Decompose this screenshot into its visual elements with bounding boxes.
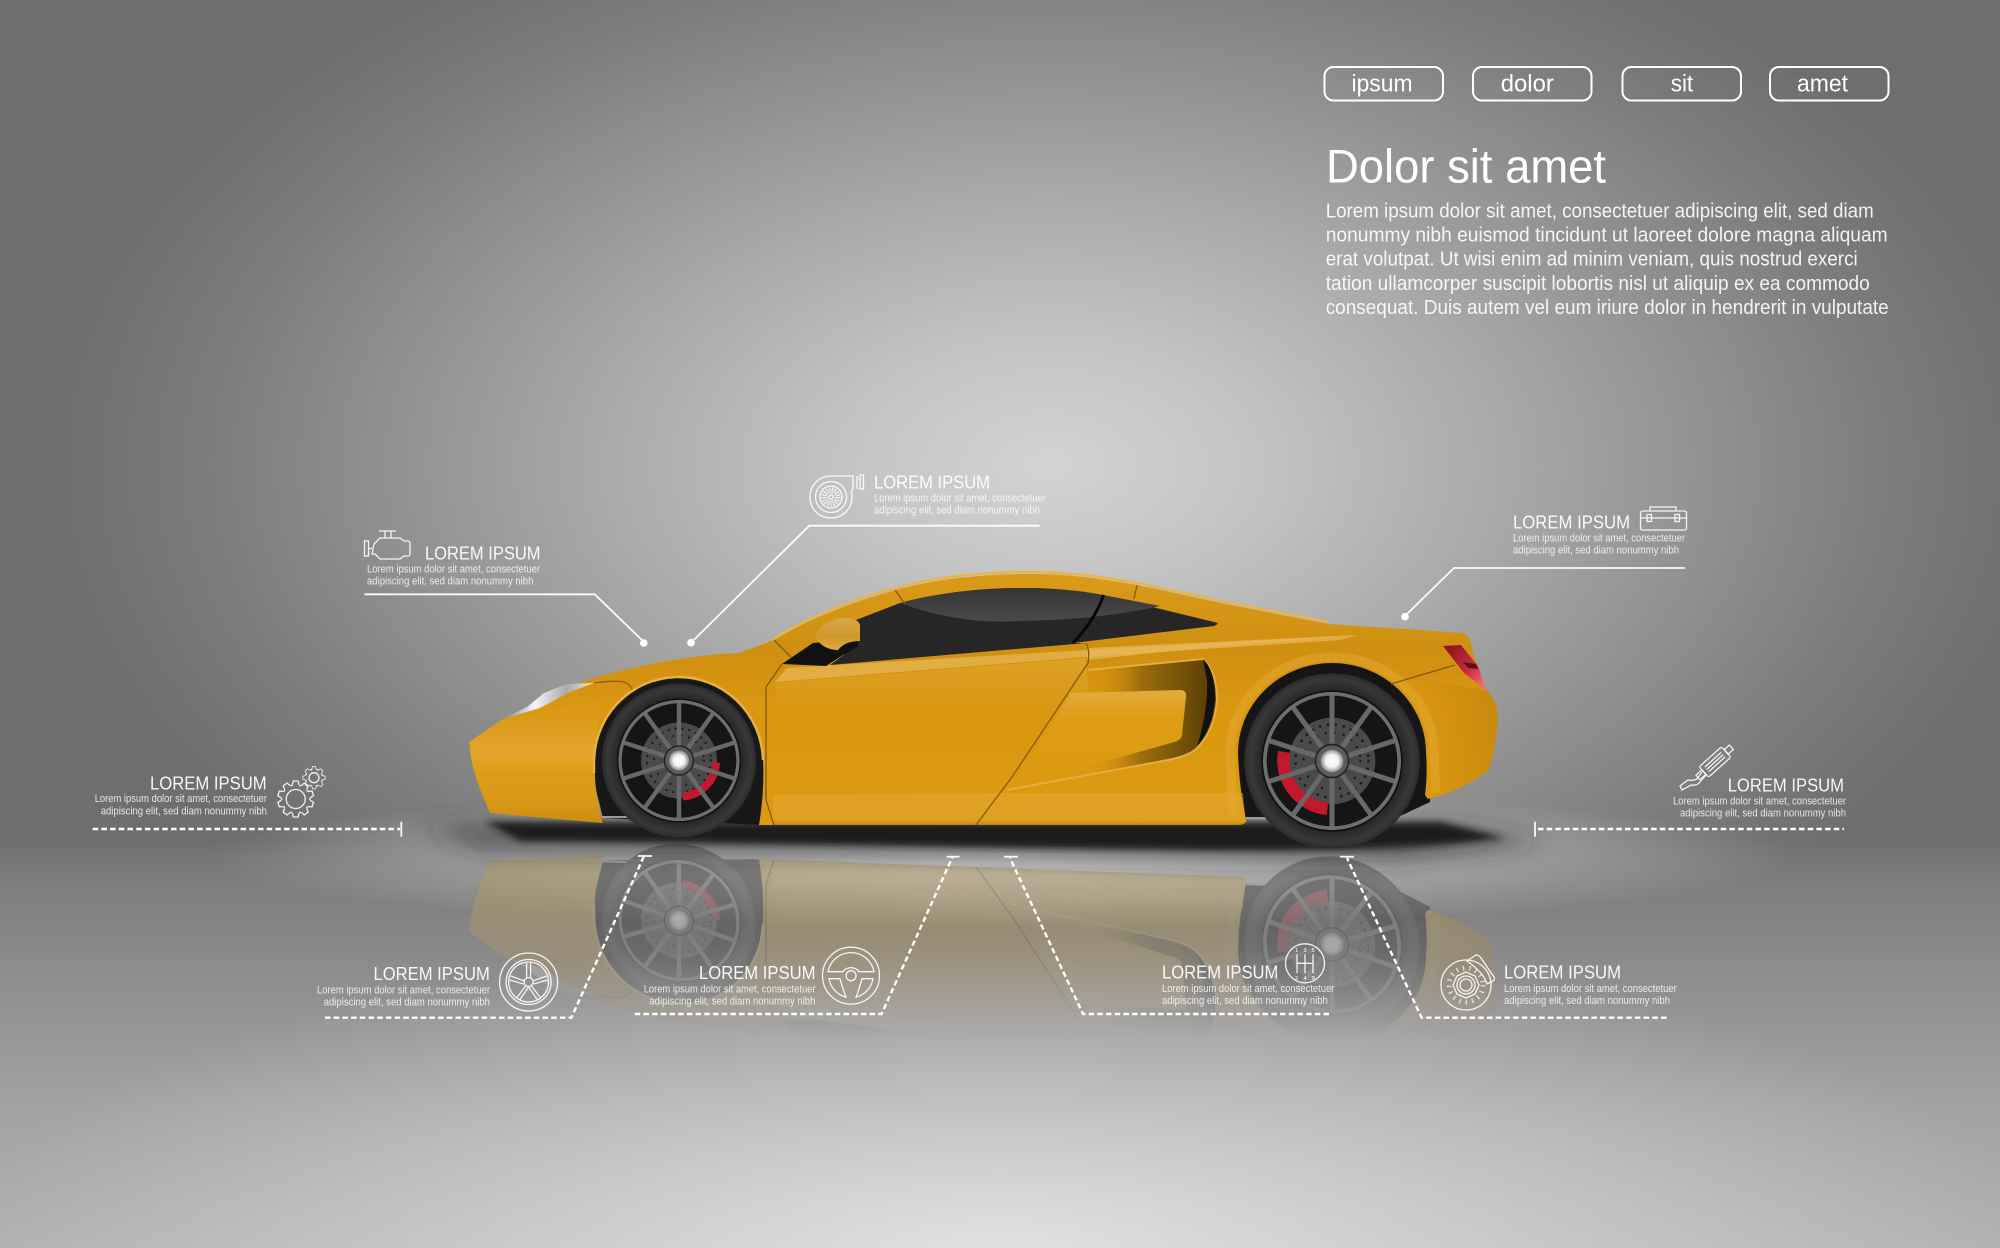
callout: brake disc [1340,857,1677,1018]
intro paragraph: tation ullamcorper suscipit lobortis nisl ut aliquip ex ea commodo [1326,272,1870,295]
callout: toolbox: adipiscing elit, sed diam nonummy nibh [1513,544,1679,556]
callout: brake disc: adipiscing elit, sed diam nonummy nibh [1504,995,1670,1007]
intro paragraph: consequat. Duis autem vel eum iriure dolor in hendrerit in vulputate [1326,296,1889,319]
icon: gear shift [1286,944,1324,983]
callout: gears: Lorem ipsum dolor sit amet, consectetuer [95,793,267,805]
tab: amet [1770,67,1888,100]
callout: turbo [687,472,1046,646]
intro paragraph: Lorem ipsum dolor sit amet, consectetuer adipiscing elit, sed diam [1326,200,1874,223]
callout: turbo: LOREM IPSUM [874,472,990,492]
callout: steering wheel: Lorem ipsum dolor sit amet, consectetuer [644,984,816,996]
icon: gear shift: 2 [1295,976,1298,982]
callout: gear shift: adipiscing elit, sed diam nonummy nibh [1162,995,1328,1007]
callout: toolbox: LOREM IPSUM [1513,512,1630,532]
callout: toolbox [1401,507,1687,620]
icon: toolbox [1640,507,1687,530]
tab: amet: amet [1797,70,1848,98]
callout: gear shift [1004,857,1335,1014]
tab: ipsum [1324,67,1443,100]
callout: wheel: LOREM IPSUM [374,964,490,984]
tab: ipsum: ipsum [1352,70,1412,98]
callout: wheel: Lorem ipsum dolor sit amet, consectetuer [317,984,490,996]
callout: exhaust [1535,742,1846,837]
intro paragraph: erat volutpat. Ut wisi enim ad minim veniam, quis nostrud exerci [1326,248,1858,271]
icon: gear shift: 5 [1312,948,1315,954]
car reflection on floor [470,844,1498,1023]
tab buttons [1324,67,1888,100]
callout: engine [364,531,648,647]
tab: dolor: dolor [1501,70,1554,98]
callout: gears [93,767,401,837]
callout: turbo: adipiscing elit, sed diam nonummy nibh [874,505,1040,517]
icon: gear shift: 4 [1304,976,1307,982]
icon: gear shift: R [1312,976,1316,982]
background: floor [0,770,2000,1248]
callout: engine: Lorem ipsum dolor sit amet, consectetuer [367,564,540,576]
callout: exhaust: Lorem ipsum dolor sit amet, consectetuer [1673,795,1846,807]
intro paragraph [1326,200,1889,319]
callout: engine: LOREM IPSUM [425,543,540,563]
callout: gears: adipiscing elit, sed diam nonummy nibh [101,806,267,818]
icon: engine [364,531,410,559]
callout: turbo: Lorem ipsum dolor sit amet, consectetuer [874,493,1046,505]
callout: wheel: adipiscing elit, sed diam nonummy nibh [324,996,490,1008]
icon: gear shift: 3 [1304,948,1307,954]
callout: steering wheel [635,857,960,1014]
callout: brake disc: Lorem ipsum dolor sit amet, consectetuer [1504,983,1677,995]
icon: brake disc [1441,955,1494,1010]
callout: steering wheel: adipiscing elit, sed diam nonummy nibh [649,996,815,1008]
icon: exhaust muffler [1680,742,1736,790]
tab: sit: sit [1671,70,1694,98]
tab: sit [1622,67,1741,100]
callout: brake disc: LOREM IPSUM [1504,962,1621,982]
callout: wheel [317,856,652,1018]
tab: dolor [1473,67,1592,100]
callout: exhaust: adipiscing elit, sed diam nonummy nibh [1680,807,1846,819]
intro paragraph: nonummy nibh euismod tincidunt ut laoreet dolore magna aliquam [1326,224,1888,247]
icon: alloy wheel [500,953,558,1011]
callout: toolbox: Lorem ipsum dolor sit amet, consectetuer [1513,532,1685,544]
icon: steering wheel [822,947,880,1004]
callout: exhaust: LOREM IPSUM [1728,776,1844,796]
title: Dolor sit amet [1326,140,1606,193]
callout: engine: adipiscing elit, sed diam nonummy nibh [367,576,533,588]
icon: gear shift: 1 [1295,948,1298,954]
icon: turbocharger [810,475,864,518]
callout: gears: LOREM IPSUM [150,773,267,793]
callout: steering wheel: LOREM IPSUM [699,963,816,983]
callout: gear shift: LOREM IPSUM [1162,962,1278,982]
icon: gears [278,767,325,817]
car ground shadow [420,822,1550,860]
car: yellow sports car side view [470,572,1498,849]
callout: gear shift: Lorem ipsum dolor sit amet, consectetuer [1162,983,1335,995]
